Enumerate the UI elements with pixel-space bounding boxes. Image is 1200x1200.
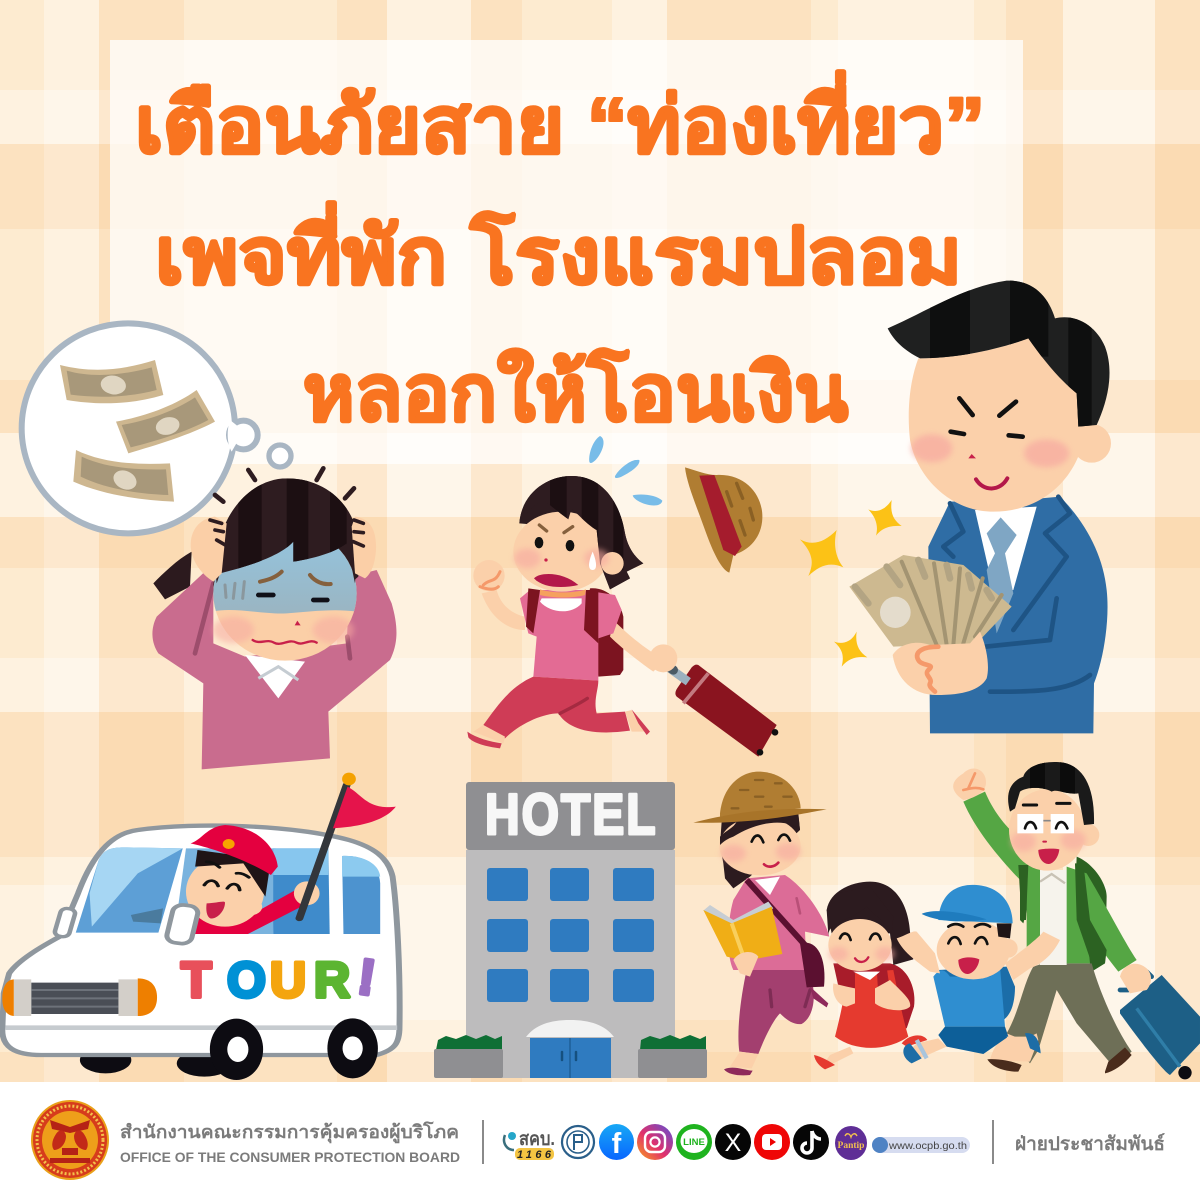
- banknotes in bubble: [60, 360, 215, 502]
- facebook: [599, 1124, 634, 1160]
- back hair: [213, 537, 358, 587]
- x: [715, 1124, 751, 1160]
- OCPB seal: [31, 1100, 109, 1180]
- van lettering TOUR!: O: [227, 952, 266, 1008]
- line: [676, 1124, 712, 1160]
- face: [213, 526, 357, 661]
- van lettering TOUR!: U: [270, 952, 306, 1008]
- hair: [216, 478, 356, 584]
- face: [909, 338, 1085, 512]
- hair tail: [153, 552, 192, 599]
- arms: [610, 620, 665, 672]
- hair: [888, 281, 1110, 427]
- facebook: f: [612, 1128, 622, 1160]
- head: [519, 476, 643, 589]
- website pill: [872, 1137, 970, 1153]
- hotline 1166: สคบ.: [519, 1129, 555, 1150]
- hotline 1166: 1166: [517, 1149, 552, 1161]
- line: LINE: [683, 1137, 705, 1148]
- pink shirt: [520, 590, 622, 681]
- hands: [893, 632, 988, 695]
- x: X: [725, 1129, 742, 1157]
- facial features: [951, 398, 1023, 437]
- lapel lines: [943, 497, 1090, 692]
- thought bubble: [22, 323, 291, 533]
- sparkle stars: [800, 500, 902, 667]
- headlights and grille: [2, 978, 157, 1016]
- hotel entrance: [526, 1020, 614, 1078]
- trousers: [483, 677, 630, 738]
- backpack: [585, 588, 623, 677]
- door mirror: [165, 904, 199, 945]
- pantip: [835, 1126, 867, 1160]
- suitcase: [665, 664, 778, 757]
- tour van: [2, 773, 400, 1080]
- side windows: [174, 848, 276, 934]
- van body: [2, 826, 400, 1055]
- feet and shoes: [473, 725, 505, 743]
- consumer protection logo: [562, 1126, 594, 1158]
- ear: [1072, 424, 1111, 463]
- van lettering TOUR!: T: [181, 952, 212, 1008]
- hotel building: [434, 782, 707, 1078]
- title: หลอกให้โอนเงิน: [303, 347, 848, 437]
- father: [953, 757, 1200, 1079]
- hands: [191, 517, 227, 582]
- suitcase: [1130, 973, 1150, 990]
- guidebook: [703, 902, 773, 927]
- website pill: www.ocpb.go.th: [888, 1140, 967, 1152]
- running woman with suitcase: [467, 436, 778, 757]
- worried woman with thought bubble of money: [22, 323, 396, 769]
- boy: [897, 885, 1060, 1063]
- fan of notes: [849, 555, 1012, 647]
- rear wheels: [80, 1047, 131, 1073]
- title: เพจที่พัก โรงแรมปลอม: [155, 201, 962, 300]
- title panel: [110, 40, 1023, 464]
- pantip: Pantip: [838, 1141, 864, 1151]
- girl: [814, 882, 927, 1069]
- tiktok: [793, 1124, 829, 1160]
- youtube: [754, 1124, 790, 1160]
- businessman holding cash: [800, 277, 1111, 733]
- front wheels: [210, 1019, 263, 1080]
- shirt collar: [245, 655, 305, 698]
- suit: [928, 497, 1108, 733]
- sweater: [152, 570, 396, 769]
- instagram: [637, 1124, 673, 1160]
- hotel sign: HOTEL: [485, 783, 658, 847]
- van lettering TOUR!: !: [355, 948, 379, 1006]
- organisation name: [120, 1121, 460, 1165]
- planters: [434, 1035, 707, 1078]
- flag: [299, 773, 396, 918]
- footer bar: [0, 1082, 1200, 1200]
- van lettering TOUR!: [181, 948, 379, 1008]
- organisation name: OFFICE OF THE CONSUMER PROTECTION BOARD: [120, 1149, 460, 1165]
- windshield: [76, 847, 183, 933]
- driver: [186, 825, 320, 934]
- tie: [987, 517, 1017, 633]
- organisation name: สำนักงานคณะกรรมการคุ้มครองผู้บริโภค: [120, 1121, 459, 1144]
- hotel windows: [487, 868, 654, 1002]
- mother: [693, 772, 829, 1075]
- happy tourist family: [693, 757, 1200, 1079]
- department name: ฝ่ายประชาสัมพันธ์: [1015, 1133, 1165, 1155]
- facial features: [225, 572, 331, 644]
- social icons: [599, 1124, 867, 1160]
- flying hat: [685, 467, 762, 573]
- van lettering TOUR!: R: [314, 952, 350, 1008]
- sweat drops: [589, 436, 662, 506]
- straw hat: [720, 772, 801, 817]
- father shoes and feet: [990, 1033, 1038, 1062]
- title: เตือนภัยสาย “ท่องเที่ยว”: [135, 70, 985, 169]
- title: [135, 70, 985, 437]
- hotline 1166: [504, 1129, 555, 1161]
